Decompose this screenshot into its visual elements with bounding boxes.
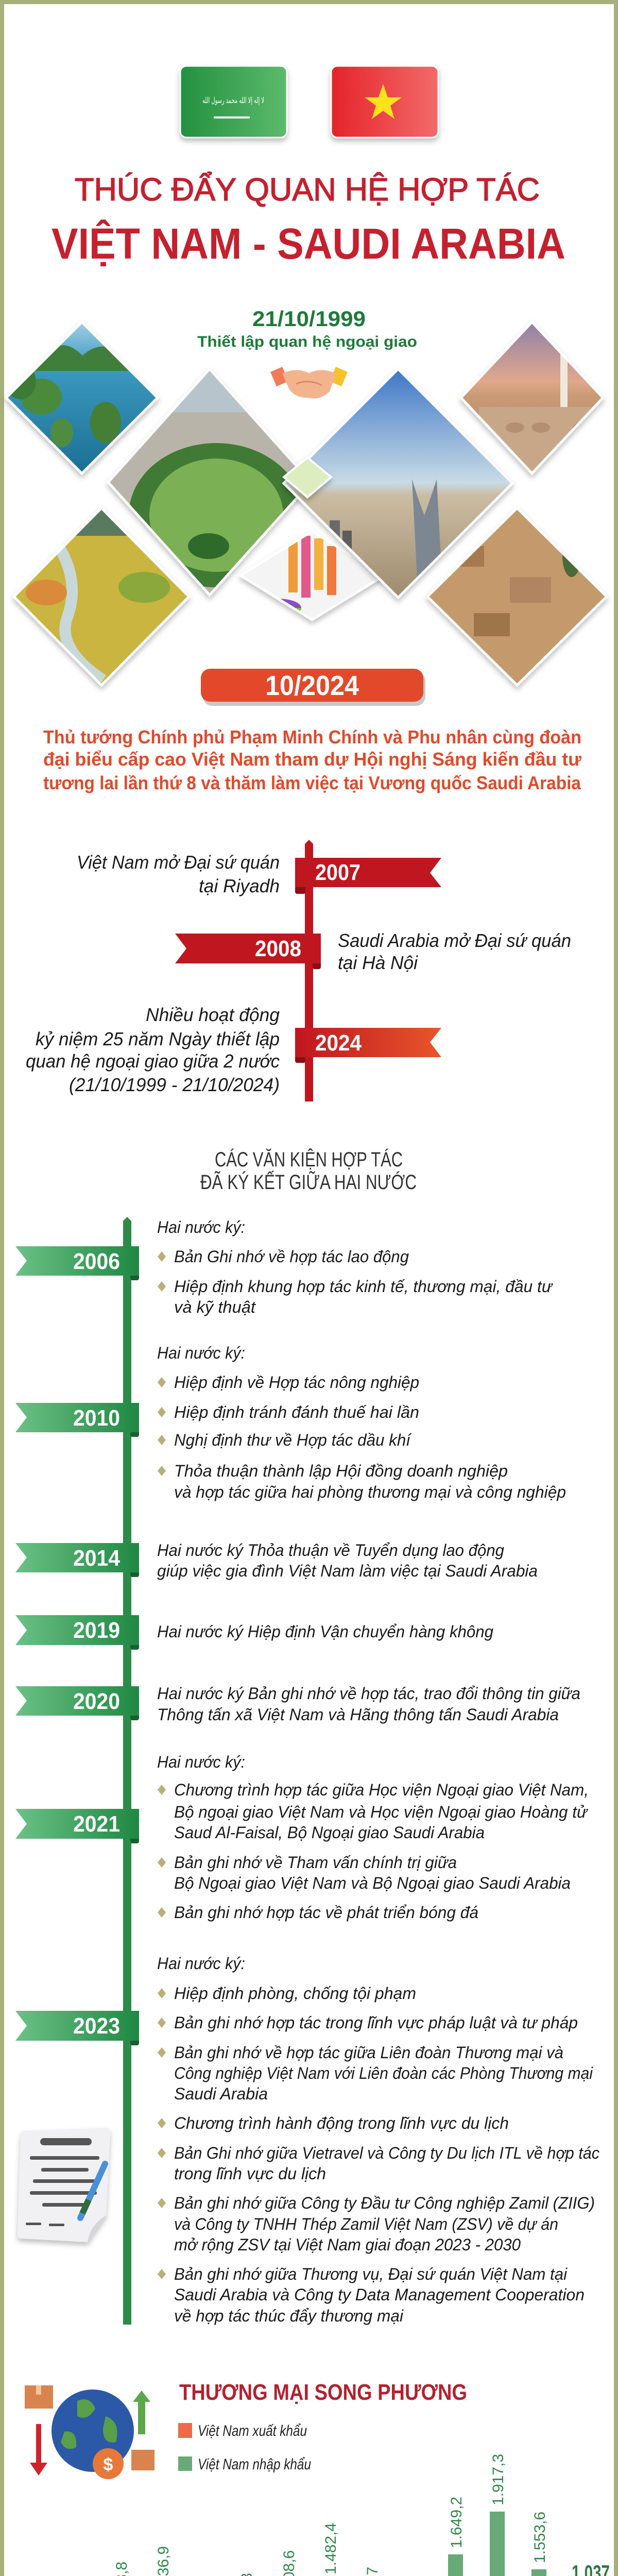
banner: 2023: 2023 xyxy=(73,2013,120,2039)
text: 2024 event: Nhiều hoạt động xyxy=(146,1004,280,1025)
icon: Saudi flag xyxy=(180,66,287,138)
items: 2023: Bản ghi nhớ hợp tác trong lĩnh vực pháp luật và tư pháp xyxy=(174,2013,578,2032)
icon: global trade: $ xyxy=(104,2455,113,2475)
items: 2010: Hiệp định về Hợp tác nông nghiệp xyxy=(174,1373,419,1392)
timeline: embassies xyxy=(26,840,571,1101)
value labels: imports: 1.482,4 xyxy=(322,2523,339,2574)
photo: small green diamond xyxy=(284,457,331,497)
items: 2023: và Công ty TNHH Thép Zamil Việt Nam (ZSV) về dự án xyxy=(174,2215,558,2233)
date: establishment xyxy=(197,307,417,350)
items: 2010: Nghị định thư về Hợp tác dầu khí xyxy=(174,1431,412,1449)
items: 2021: Chương trình hợp tác giữa Học viện Ngoại giao Việt Nam, xyxy=(174,1781,589,1799)
items: 2021: Hai nước ký: xyxy=(157,1753,245,1771)
items: 2010 xyxy=(157,1344,566,1501)
items: 2023: Chương trình hành động trong lĩnh vực du lịch xyxy=(174,2114,509,2132)
items: 2014: Hai nước ký Thỏa thuận về Tuyển dụng lao động xyxy=(157,1541,504,1560)
banner: 2008 xyxy=(175,934,321,969)
text: 2007 event xyxy=(77,852,280,896)
banner: 2020 xyxy=(15,1686,139,1720)
banner: 2024: 2024 xyxy=(315,1030,362,1056)
title: VIỆT NAM - SAUDI ARABIA xyxy=(52,219,565,268)
items: 2006: Hiệp định khung hợp tác kinh tế, thương mại, đầu tư xyxy=(174,1277,554,1296)
heading: cooperation documents xyxy=(200,1148,417,1194)
heading: bilateral trade: THƯƠNG MẠI SONG PHƯƠNG xyxy=(179,2380,467,2405)
icon: Vietnam flag xyxy=(331,66,438,138)
items: 2014: giúp việc gia đình Việt Nam làm việc tại Saudi Arabia xyxy=(157,1562,538,1580)
items: 2023: Saudi Arabia và Công ty Data Management Cooperation xyxy=(174,2285,585,2304)
items: 2023: trong lĩnh vực du lịch xyxy=(174,2164,326,2183)
items: 2020 xyxy=(157,1684,580,1724)
text: 2024 event: quan hệ ngoại giao giữa 2 nước xyxy=(26,1050,280,1072)
items: 2023: Hai nước ký: xyxy=(157,1954,245,1973)
photo: Ha Long bay xyxy=(5,319,160,474)
banner: 2007 xyxy=(295,858,441,894)
banner: 2006 xyxy=(15,1246,139,1280)
items: 2021: Bộ Ngoại giao Việt Nam và Bộ Ngoại giao Saudi Arabia xyxy=(174,1874,571,1892)
photo collage xyxy=(5,319,610,688)
text: 2024 event: (21/10/1999 - 21/10/2024) xyxy=(69,1074,280,1095)
items: 2023: Công nghiệp Việt Nam với Liên đoàn các Phòng Thương mại xyxy=(174,2064,593,2082)
banner: 2024 xyxy=(295,1028,441,1063)
items: 2006 xyxy=(157,1218,554,1316)
timeline: documents xyxy=(15,1217,599,2325)
badge: 10/2024 xyxy=(201,669,425,706)
text: 2024 event xyxy=(26,1004,280,1095)
value labels: imports xyxy=(29,2454,548,2576)
items: 2021 xyxy=(157,1753,589,1922)
items: 2019: Hai nước ký Hiệp định Vận chuyển hàng không xyxy=(157,1622,493,1641)
items: 2023: mở rộng ZSV tại Việt Nam giai đoạn 2023 - 2030 xyxy=(174,2235,521,2254)
banner: 2021 xyxy=(15,1809,139,1843)
banner: 2008: 2008 xyxy=(255,936,301,961)
flags xyxy=(180,66,438,138)
value labels: imports: 1.917,3 xyxy=(490,2454,507,2505)
bar chart: trade 2011-2024 xyxy=(7,2454,610,2576)
title xyxy=(52,172,565,268)
value labels: imports: 1.553,6 xyxy=(531,2512,548,2563)
items: 2010: Thỏa thuận thành lập Hội đồng doanh nghiệp xyxy=(174,1462,508,1480)
icon: handshake xyxy=(270,367,348,399)
items: 2023: Bản ghi nhớ giữa Công ty Đầu tư Công nghiệp Zamil (ZIIG) xyxy=(174,2194,595,2212)
items: 2006: và kỹ thuật xyxy=(174,1298,256,1316)
text block: visit description xyxy=(43,726,582,793)
items: 2023: Hiệp định phòng, chống tội phạm xyxy=(174,1984,416,2003)
text: 2024 event: kỷ niệm 25 năm Ngày thiết lập xyxy=(36,1028,280,1049)
bars: imports xyxy=(29,2512,595,2576)
date: establishment: 21/10/1999 xyxy=(252,307,366,331)
items: 2021: Saud Al-Faisal, Bộ Ngoại giao Saudi Arabia xyxy=(174,1823,485,1842)
photo: rice terraces xyxy=(13,505,191,688)
text block: visit description: Thủ tướng Chính phủ Phạm Minh Chính và Phu nhân cùng đoàn xyxy=(43,726,581,748)
items: 2021: Bản ghi nhớ hợp tác về phát triển bóng đá xyxy=(174,1903,478,1922)
text: 2008 event xyxy=(338,930,571,973)
text block: visit description: đại biểu cấp cao Việt Nam tham dự Hội nghị Sáng kiến đầu tư xyxy=(43,749,582,770)
banner: 2010: 2010 xyxy=(73,1405,120,1431)
legend xyxy=(178,2422,311,2473)
heading: cooperation documents: CÁC VĂN KIỆN HỢP TÁC xyxy=(215,1148,403,1171)
banner: 2020: 2020 xyxy=(73,1689,120,1714)
items: 2021: Bộ ngoại giao Việt Nam và Học viện Ngoại giao Hoàng tử xyxy=(174,1803,589,1821)
title: THÚC ĐẨY QUAN HỆ HỢP TÁC xyxy=(75,172,540,208)
heading: cooperation documents: ĐÃ KÝ KẾT GIỮA HAI NƯỚC xyxy=(200,1170,417,1194)
items: 2023 xyxy=(157,1954,599,2325)
items: 2010: và hợp tác giữa hai phòng thương mại và công nghiệp xyxy=(174,1483,566,1501)
icon: Saudi flag: لا إله إلا الله محمد رسول الله xyxy=(202,95,264,106)
icon: global trade xyxy=(25,2385,154,2479)
legend: Việt Nam nhập khẩu xyxy=(198,2456,311,2473)
date: establishment: Thiết lập quan hệ ngoại giao xyxy=(197,333,417,350)
banner: 2019 xyxy=(15,1615,139,1650)
photo: chart diamond xyxy=(237,533,382,626)
items: 2010: Hai nước ký: xyxy=(157,1344,245,1362)
items: 2006: Bản Ghi nhớ về hợp tác lao động xyxy=(174,1247,409,1266)
text block: visit description: tương lai lần thứ 8 và thăm làm việc tại Vương quốc Saudi Arabia xyxy=(43,772,581,793)
items: 2023: về hợp tác thúc đẩy thương mại xyxy=(174,2307,404,2325)
badge: 10/2024: 10/2024 xyxy=(265,670,359,701)
text: 2008 event: tại Hà Nội xyxy=(338,952,418,973)
items: 2020: Thông tấn xã Việt Nam và Hãng thông tấn Saudi Arabia xyxy=(157,1705,559,1724)
banner: 2007: 2007 xyxy=(315,860,360,885)
banner: 2023 xyxy=(15,2011,139,2045)
banner: 2019: 2019 xyxy=(73,1618,120,1643)
items: 2014 xyxy=(157,1541,538,1580)
items: 2023: Bản ghi nhớ giữa Thương vụ, Đại sứ quán Việt Nam tại xyxy=(174,2265,568,2283)
items: 2020: Hai nước ký Bản ghi nhớ về hợp tác, trao đổi thông tin giữa xyxy=(157,1684,580,1703)
banner: 2014: 2014 xyxy=(73,1546,120,1571)
text: 2007 event: tại Riyadh xyxy=(199,875,280,896)
text: 2007 event: Việt Nam mở Đại sứ quán xyxy=(77,852,280,873)
banner: 2021: 2021 xyxy=(73,1811,120,1837)
text: 2008 event: Saudi Arabia mở Đại sứ quán xyxy=(338,930,571,951)
banner: 2006: 2006 xyxy=(73,1249,120,1274)
photo: Riyadh xyxy=(281,366,515,600)
items: 2021: Bản ghi nhớ về Tham vấn chính trị giữa xyxy=(174,1853,457,1872)
banner: 2010 xyxy=(15,1403,139,1437)
items: 2023: Bản Ghi nhớ giữa Vietravel và Công ty Du lịch ITL về hợp tác xyxy=(174,2144,599,2162)
items: 2023: Saudi Arabia xyxy=(174,2084,268,2103)
icon: document with pen xyxy=(18,2128,110,2242)
photo: Hanoi Hoan Kiem lake xyxy=(106,366,314,598)
value labels: imports: 1.649,2 xyxy=(448,2497,465,2548)
photo: Medina mosque xyxy=(458,319,605,474)
items: 2010: Hiệp định tránh đánh thuế hai lần xyxy=(174,1403,419,1421)
photo: Diriyah mud-brick xyxy=(425,505,610,688)
banner: 2014 xyxy=(15,1543,139,1577)
items: 2006: Hai nước ký: xyxy=(157,1218,245,1236)
items: 2023: Bản ghi nhớ về hợp tác giữa Liên đoàn Thương mại và xyxy=(174,2043,563,2062)
legend: Việt Nam xuất khẩu xyxy=(198,2422,307,2439)
